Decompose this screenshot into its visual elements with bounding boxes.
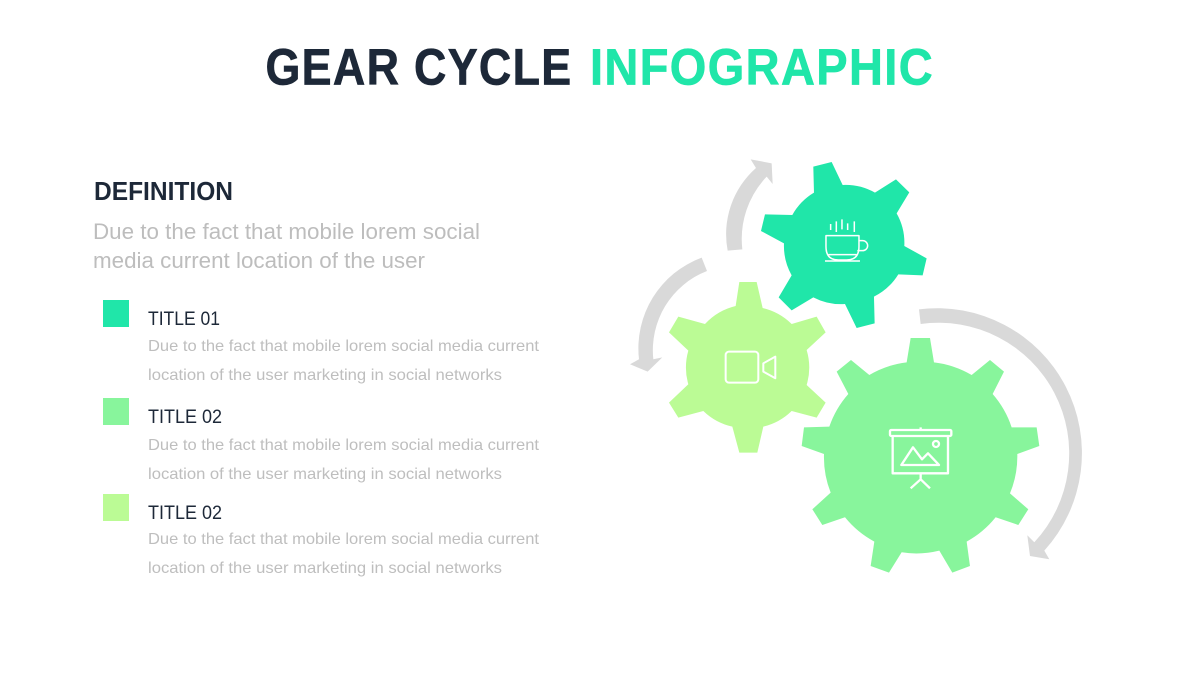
gear: light green with video camera	[669, 282, 826, 453]
item text	[148, 531, 540, 577]
gear shape	[669, 282, 826, 453]
item heading: TITLE 01	[148, 308, 220, 330]
icon: presentation board	[890, 427, 951, 488]
item text: location of the user marketing in social networks	[148, 560, 502, 577]
title: GEAR CYCLE	[266, 38, 572, 96]
item heading: TITLE 02	[148, 502, 222, 524]
arrow: curving up to teal gear	[726, 159, 773, 251]
item text: Due to the fact that mobile lorem social media current	[148, 531, 540, 548]
arrow: large arc around green gear	[919, 308, 1082, 559]
title: INFOGRAPHIC	[590, 38, 934, 96]
icon: coffee cup	[825, 219, 868, 261]
item text: Due to the fact that mobile lorem social media current	[148, 338, 540, 355]
item text: Due to the fact that mobile lorem social media current	[148, 437, 540, 454]
definition block	[93, 176, 480, 273]
definition heading: DEFINITION	[94, 176, 233, 206]
arrow: curving down past light green gear	[630, 258, 707, 372]
gear: green with presentation board	[802, 338, 1039, 573]
legend swatch: green	[103, 398, 129, 425]
legend swatch: light green	[103, 494, 129, 521]
legend swatch: teal	[103, 300, 129, 327]
definition text	[93, 219, 480, 273]
definition text: Due to the fact that mobile lorem social	[93, 219, 480, 244]
item text: location of the user marketing in social networks	[148, 367, 502, 384]
icon: video camera	[726, 352, 775, 383]
list item: title 01	[103, 300, 540, 384]
item text	[148, 437, 540, 483]
item heading: TITLE 02	[148, 406, 222, 428]
gear shape	[761, 162, 927, 328]
item text	[148, 338, 540, 384]
definition text: media current location of the user	[93, 248, 425, 273]
list item: title 02	[103, 398, 540, 483]
list item: second title 02	[103, 494, 540, 577]
item text: location of the user marketing in social networks	[148, 466, 502, 483]
title	[266, 38, 934, 96]
gear shape	[802, 338, 1039, 573]
gear: teal with coffee cup	[761, 162, 927, 328]
